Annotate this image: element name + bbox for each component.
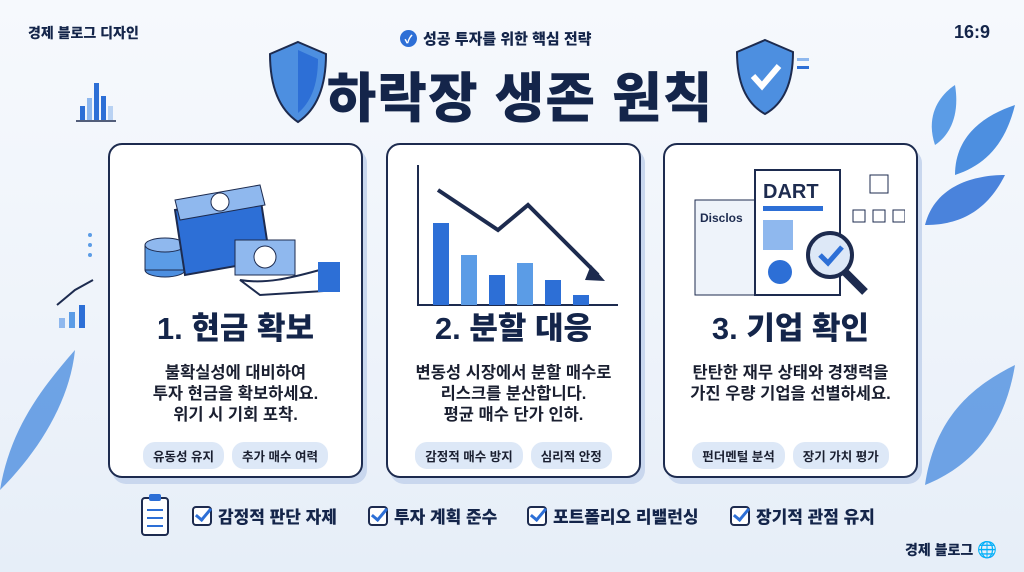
text: 불확실성에 대비하여 — [165, 364, 306, 382]
panel: company check — [663, 143, 918, 478]
icon: right shield — [736, 38, 809, 116]
text: 탄탄한 재무 상태와 경쟁력을 — [693, 364, 888, 382]
tags — [415, 442, 612, 469]
tags — [143, 442, 328, 469]
tags: 장기 가치 평가 — [803, 450, 879, 464]
tags: 심리적 안정 — [541, 450, 602, 464]
text: 변동성 시장에서 분할 매수로 — [416, 364, 611, 382]
text: 평균 매수 단가 인하. — [444, 406, 583, 424]
icon: small bar chart — [76, 83, 116, 122]
text — [153, 364, 318, 424]
text — [690, 364, 891, 403]
panel: split buying — [386, 143, 641, 478]
icon: DART documents magnifier: Disclos — [700, 211, 743, 225]
icon: right leaves — [925, 85, 1015, 485]
icon: clipboard — [141, 494, 169, 536]
heading: 3. 기업 확인 — [712, 311, 869, 346]
tags: 추가 매수 여력 — [242, 450, 318, 464]
subtitle: ✓ — [404, 34, 413, 46]
checklist item: 감정적 판단 자제 — [218, 508, 337, 527]
footer brand: 경제 블로그 🌐 — [905, 542, 997, 559]
icon: DART documents magnifier — [694, 169, 905, 296]
icon: DART documents magnifier: DART — [763, 181, 819, 203]
subtitle: 성공 투자를 위한 핵심 전략 — [423, 31, 591, 48]
text — [416, 364, 611, 424]
checklist item: 장기적 관점 유지 — [756, 508, 875, 527]
heading: 2. 분할 대응 — [435, 311, 592, 346]
tags: 유동성 유지 — [153, 450, 214, 464]
icon: falling chart — [417, 165, 618, 306]
text: 리스크를 분산합니다. — [441, 385, 586, 403]
text: 투자 현금을 확보하세요. — [153, 385, 318, 403]
tags: 펀더멘털 분석 — [702, 450, 775, 464]
top-left brand: 경제 블로그 디자인 — [28, 25, 139, 41]
checklist item: 투자 계획 준수 — [394, 508, 497, 527]
text: 가진 우량 기업을 선별하세요. — [690, 385, 891, 403]
tags — [692, 442, 889, 469]
icon: left leaves — [0, 350, 75, 490]
text: 위기 시 기회 포착. — [173, 406, 298, 424]
icon: money stack — [144, 184, 340, 296]
panel: cash — [108, 143, 363, 478]
heading: 1. 현금 확보 — [157, 311, 314, 346]
tags: 감정적 매수 방지 — [425, 450, 513, 464]
icon: left mini growth chart — [56, 233, 94, 328]
icon: left shield — [269, 40, 327, 124]
checklist item: 포트폴리오 리밸런싱 — [553, 508, 698, 527]
ratio label: 16:9 — [954, 22, 990, 42]
title: 하락장 생존 원칙 — [327, 69, 713, 129]
